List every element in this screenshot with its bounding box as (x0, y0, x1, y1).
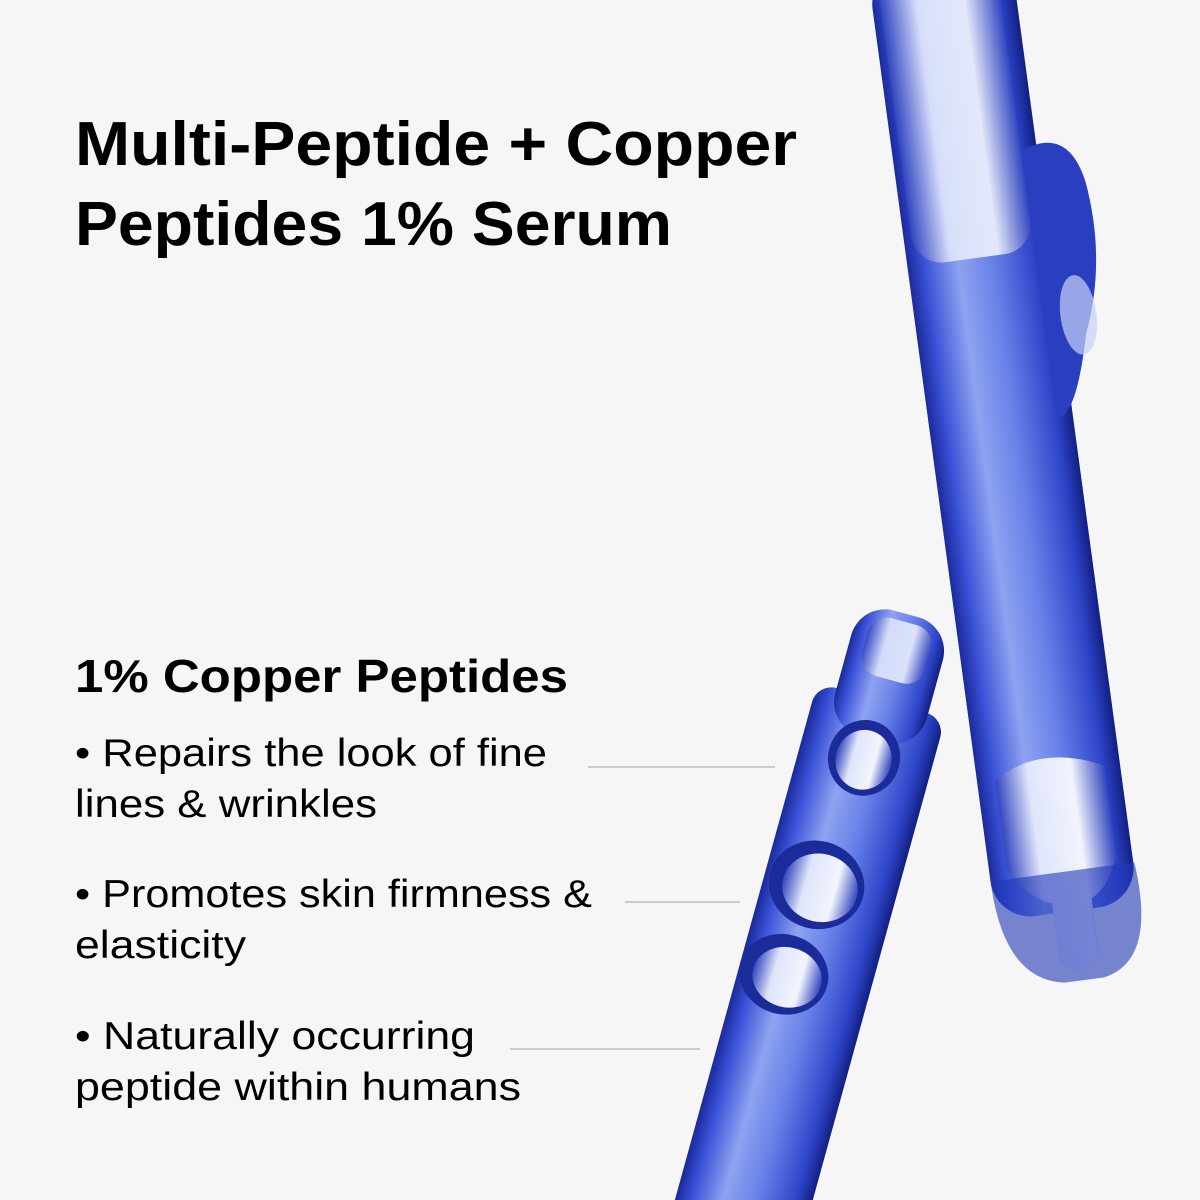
bullet 1 (75, 732, 547, 826)
bullet 1: • Repairs the look of fine (75, 732, 547, 775)
bullet 2: • Promotes skin firmness & (75, 873, 592, 916)
title: Multi-Peptide + Copper (75, 110, 797, 179)
bullet 3 (75, 1015, 521, 1109)
subheading: 1% Copper Peptides (75, 650, 568, 702)
bullet 2 (75, 873, 592, 967)
bullet 3: • Naturally occurring (75, 1015, 475, 1058)
bullet 1: lines & wrinkles (75, 783, 377, 826)
pipette: lower left (669, 596, 969, 1200)
connector lines (510, 767, 775, 1049)
pipette: upper right (867, 0, 1194, 991)
title: Peptides 1% Serum (75, 190, 672, 259)
title (75, 110, 797, 259)
bullet 3: peptide within humans (75, 1066, 521, 1109)
bullet 2: elasticity (75, 924, 247, 967)
